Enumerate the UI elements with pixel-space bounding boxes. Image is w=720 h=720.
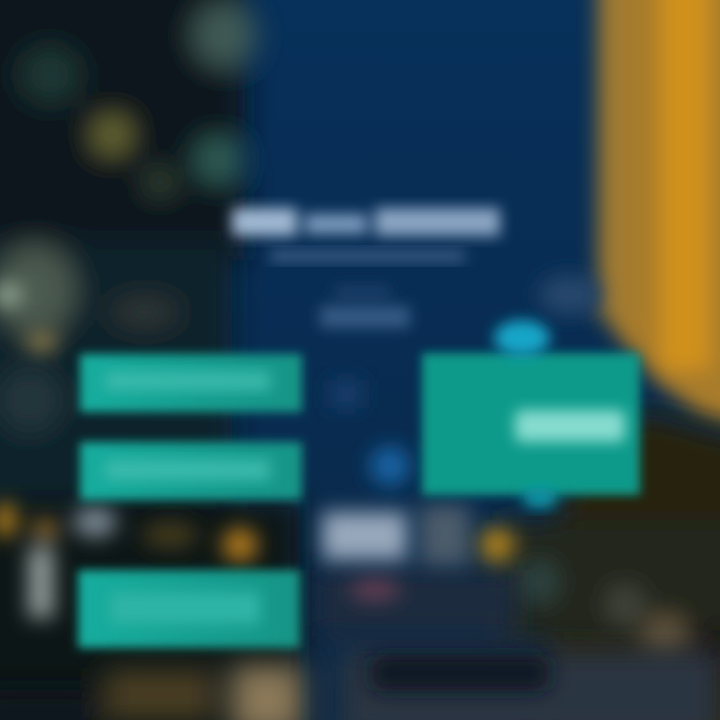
callout highlight xyxy=(515,410,625,442)
icon: callout top badge xyxy=(494,320,550,356)
bright building blur xyxy=(322,512,515,563)
lower right: trees and street xyxy=(500,410,720,720)
car xyxy=(349,505,550,691)
subtitle xyxy=(270,250,465,262)
icon: faint upper right xyxy=(538,275,602,315)
right building: orange tower xyxy=(598,0,720,430)
icon: callout bottom badge xyxy=(522,488,558,508)
panel: teal box 3 xyxy=(78,570,300,648)
small centre marker xyxy=(330,380,362,408)
panel: teal box 1 xyxy=(80,354,302,412)
title xyxy=(232,208,500,236)
text block: box 1 xyxy=(105,372,270,390)
text block: box 2 xyxy=(105,460,270,480)
text block: box 3 xyxy=(110,592,260,624)
panel: large teal callout xyxy=(422,320,640,508)
panel: teal box 2 xyxy=(80,442,302,500)
lower centre: street scene xyxy=(0,570,720,720)
icon: blue dot centre xyxy=(370,446,410,486)
left building xyxy=(0,0,300,720)
tagline xyxy=(320,288,410,328)
left building lights xyxy=(0,283,258,618)
